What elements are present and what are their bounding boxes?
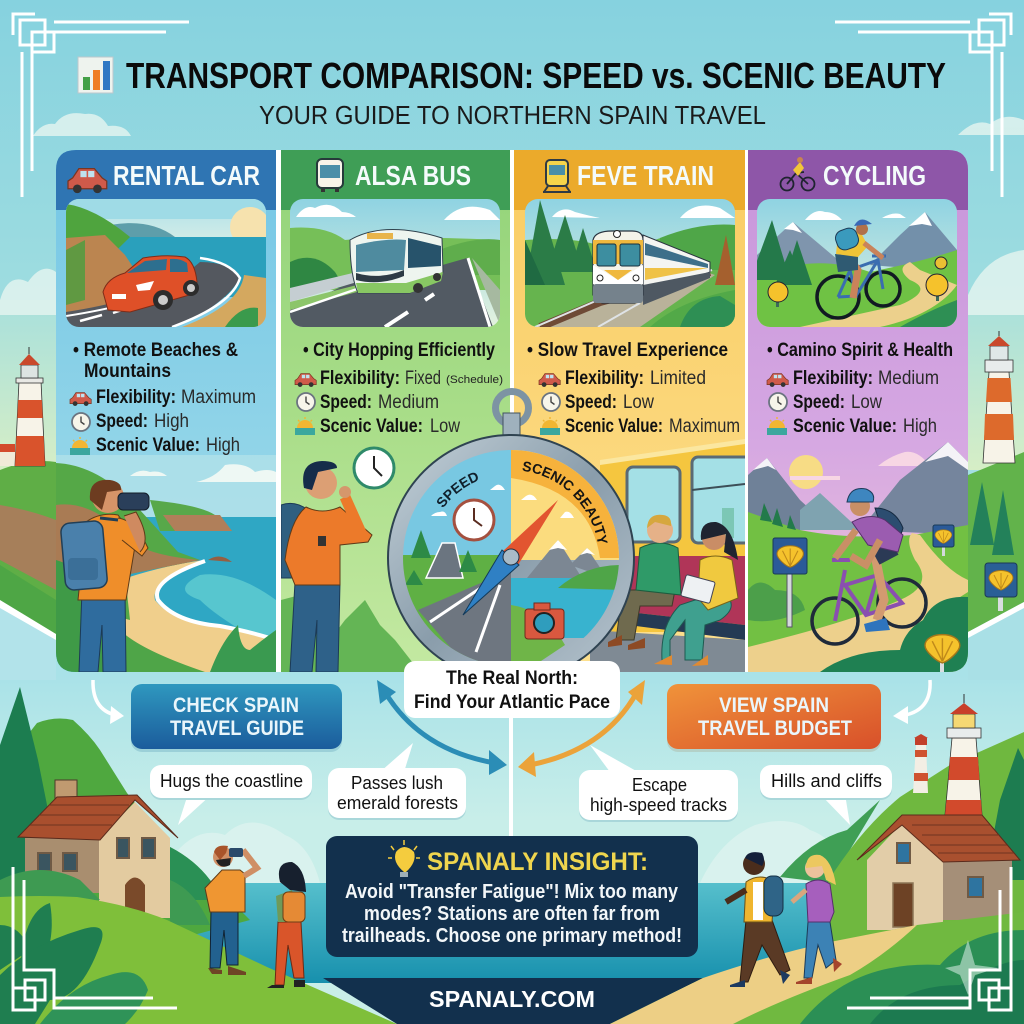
insight text: trailheads. Choose one primary method! bbox=[342, 925, 682, 947]
compass needle bbox=[463, 500, 558, 615]
insight text bbox=[342, 881, 682, 947]
sign outside cycling panel bbox=[985, 563, 1017, 611]
row: speed bbox=[769, 391, 882, 413]
corner ornament bottom left bbox=[13, 867, 177, 1010]
person: photographer bbox=[60, 480, 149, 672]
bubble: passes lush emerald forests: emerald forests bbox=[337, 792, 458, 813]
train bbox=[593, 230, 710, 305]
text: remote beaches bbox=[73, 339, 238, 382]
icon: big shell bbox=[925, 635, 960, 674]
button: check spain travel guide: CHECK SPAIN bbox=[173, 694, 299, 717]
bubble: passes lush emerald forests bbox=[328, 743, 466, 820]
button: check spain travel guide bbox=[131, 684, 342, 752]
row: flexibility bbox=[767, 367, 939, 389]
bubble: escape high-speed tracks: high-speed tracks bbox=[590, 794, 727, 815]
icon: wall clock bbox=[354, 448, 394, 488]
left side coast outside panel bbox=[0, 461, 56, 680]
bubble: escape high-speed tracks: Escape bbox=[632, 774, 687, 795]
button: check spain travel guide: TRAVEL GUIDE bbox=[170, 717, 304, 740]
row: speed bbox=[72, 410, 189, 432]
button: view spain travel budget bbox=[667, 684, 881, 752]
lighthouse right bbox=[983, 331, 1015, 463]
clouds bbox=[0, 113, 1024, 680]
right side coast outside panel bbox=[968, 452, 1024, 680]
row: scenic value: High bbox=[903, 416, 937, 437]
dial bbox=[403, 450, 619, 661]
insight text: modes? Stations are often far from bbox=[364, 903, 660, 925]
row: scenic value: Maximum bbox=[669, 416, 740, 437]
compass case bbox=[388, 435, 634, 681]
callout: the real north: Find Your Atlantic Pace bbox=[414, 691, 610, 713]
row: speed: Low bbox=[851, 392, 882, 413]
small arrowhead left bbox=[110, 706, 124, 724]
header band: rental car bbox=[56, 150, 276, 210]
row: speed: Medium bbox=[378, 392, 439, 413]
bottom left hills bbox=[0, 687, 250, 960]
cyclist bbox=[817, 219, 900, 318]
people: walking couple bbox=[726, 852, 842, 987]
row: speed: Speed: bbox=[793, 391, 845, 413]
text: remote beaches: Mountains bbox=[84, 360, 171, 382]
row: scenic value bbox=[540, 415, 740, 437]
panel: alsa bus bbox=[281, 150, 510, 672]
row: speed bbox=[542, 391, 654, 413]
heading: rental car: RENTAL CAR bbox=[113, 160, 260, 191]
arrow: orange curved double bbox=[518, 680, 645, 777]
heading: feve train: FEVE TRAIN bbox=[577, 160, 714, 191]
foreground plants right bbox=[800, 930, 1024, 1024]
row: flexibility: Flexibility: bbox=[96, 386, 176, 408]
text: remote beaches: • Remote Beaches & bbox=[73, 339, 238, 361]
coach bbox=[350, 229, 443, 293]
row: flexibility: Flexibility: bbox=[320, 367, 400, 389]
dial: scenic half bbox=[511, 450, 619, 661]
row: speed: Speed: bbox=[565, 391, 617, 413]
lighthouse left bbox=[0, 347, 45, 466]
arrow: blue curved double bbox=[377, 680, 507, 775]
foreground meadow left bbox=[0, 896, 397, 1024]
row: speed: High bbox=[154, 411, 189, 432]
bubble: passes lush emerald forests: Passes lush bbox=[351, 772, 443, 793]
clouds behind shore bbox=[170, 821, 850, 883]
text: slow travel: • Slow Travel Experience bbox=[527, 339, 728, 361]
callout: the real north: The Real North: bbox=[446, 667, 578, 689]
dial: speed half bbox=[403, 450, 511, 661]
scene: camino trail bbox=[748, 442, 968, 672]
lighthouse bottom right bbox=[945, 694, 982, 815]
scene: coastal beach bbox=[56, 455, 276, 672]
icon: bus bbox=[317, 159, 343, 192]
row: flexibility: Fixed bbox=[405, 368, 441, 389]
panel: cycling bbox=[748, 150, 968, 674]
panel gaps bbox=[276, 150, 748, 672]
footer url: SPANALY.COM bbox=[429, 986, 595, 1012]
row: flexibility bbox=[539, 367, 706, 389]
button: view spain travel budget: VIEW SPAIN bbox=[719, 694, 829, 717]
heading: alsa bus: ALSA BUS bbox=[355, 160, 471, 191]
header band: cycling bbox=[748, 150, 968, 210]
corner ornament top right bbox=[835, 14, 1011, 197]
button: view spain travel budget: TRAVEL BUDGET bbox=[698, 717, 852, 740]
row: speed: Speed: bbox=[320, 391, 372, 413]
icon: camera bbox=[525, 603, 564, 639]
small lighthouse bbox=[913, 734, 928, 793]
bubble: hills and cliffs bbox=[760, 765, 892, 825]
side sky tint right bbox=[968, 300, 1024, 470]
compass stem bbox=[503, 413, 520, 439]
text: camino spirit: • Camino Spirit & Health bbox=[767, 339, 953, 361]
row: speed: Low bbox=[623, 392, 654, 413]
foreground plants left bbox=[0, 903, 148, 1024]
house left bbox=[18, 780, 178, 918]
row: speed: Speed: bbox=[96, 410, 148, 432]
footer band bbox=[323, 978, 703, 1024]
row: flexibility: (Schedule) bbox=[446, 374, 503, 386]
foreground meadow right bbox=[610, 912, 1024, 1024]
row: flexibility: Maximum bbox=[181, 387, 256, 408]
bubble: hugs the coastline: Hugs the coastline bbox=[160, 770, 303, 791]
icon: bicycle bbox=[780, 157, 814, 190]
bush right of house left bbox=[0, 870, 210, 925]
person: cyclist on purple bike bbox=[812, 489, 926, 644]
red car bbox=[103, 256, 199, 312]
vertical divider bbox=[509, 715, 513, 837]
row: flexibility: Limited bbox=[650, 368, 706, 389]
header band: alsa bus bbox=[281, 150, 510, 210]
sign: scallop shell bbox=[773, 538, 807, 627]
small arrowhead right bbox=[893, 706, 908, 724]
person: man with backpack bbox=[281, 461, 372, 672]
person: woman with tablet bbox=[654, 522, 738, 666]
row: flexibility: Flexibility: bbox=[793, 367, 873, 389]
header band: feve train bbox=[514, 150, 745, 210]
image card: coastal road and red car bbox=[66, 199, 270, 327]
small arrow left bbox=[93, 680, 120, 716]
sea bbox=[150, 883, 870, 983]
corner ornament bottom right bbox=[847, 867, 1011, 1010]
label: scenic beauty: SCENIC BEAUTY bbox=[522, 462, 608, 543]
icon: dial clock bbox=[454, 500, 494, 540]
row: scenic value: Scenic Value: bbox=[565, 415, 663, 437]
row: scenic value: High bbox=[206, 435, 240, 456]
sand path bbox=[610, 925, 917, 1024]
row: flexibility: Flexibility: bbox=[565, 367, 644, 389]
image card: coach on highway bbox=[290, 199, 500, 327]
row: flexibility bbox=[70, 386, 256, 408]
row: flexibility bbox=[295, 367, 503, 389]
sign: small shell marker bbox=[933, 525, 954, 556]
image card: feve train in forest bbox=[525, 199, 735, 327]
compass bbox=[387, 388, 635, 661]
side sky tint left bbox=[0, 300, 56, 470]
label: speed: SPEED bbox=[437, 472, 478, 507]
icon: car bbox=[68, 169, 107, 193]
text: city hopping: • City Hopping Efficiently bbox=[303, 339, 495, 361]
title icon: bar chart bbox=[78, 57, 113, 93]
bubble: hugs the coastline bbox=[150, 765, 312, 825]
bottom right hills bbox=[780, 732, 1024, 950]
heading: spanaly insight: SPANALY INSIGHT: bbox=[427, 848, 648, 876]
icon: light bulb bbox=[388, 840, 420, 877]
insight text: Avoid "Transfer Fatigue"! Mix too many bbox=[345, 881, 679, 903]
subtitle: YOUR GUIDE TO NORTHERN SPAIN TRAVEL bbox=[259, 100, 766, 130]
icon: train bbox=[543, 160, 571, 192]
row: scenic value: Low bbox=[430, 416, 460, 437]
panel: spanaly insight bbox=[326, 836, 698, 957]
panel: feve train bbox=[514, 150, 752, 672]
row: scenic value: Scenic Value: bbox=[793, 415, 897, 437]
image card: mountain trail cyclist bbox=[750, 199, 957, 327]
bubble: escape high-speed tracks bbox=[579, 745, 738, 822]
small arrow right bbox=[900, 680, 930, 716]
heading: cycling: CYCLING bbox=[823, 160, 926, 191]
row: scenic value: Scenic Value: bbox=[320, 415, 423, 437]
compass ring bbox=[496, 392, 528, 424]
row: flexibility: Medium bbox=[878, 368, 939, 389]
row: speed bbox=[297, 391, 439, 413]
corner ornament top left bbox=[13, 14, 189, 197]
scene: train carriage interior bbox=[590, 439, 752, 672]
row: scenic value: Scenic Value: bbox=[96, 434, 200, 456]
house right bbox=[857, 815, 1020, 930]
panel: rental car bbox=[56, 150, 276, 672]
callout: the real north bbox=[404, 661, 620, 718]
people: hikers with binoculars bbox=[205, 846, 306, 988]
person: man on seat bbox=[608, 515, 681, 650]
bubble: hills and cliffs: Hills and cliffs bbox=[771, 770, 882, 791]
